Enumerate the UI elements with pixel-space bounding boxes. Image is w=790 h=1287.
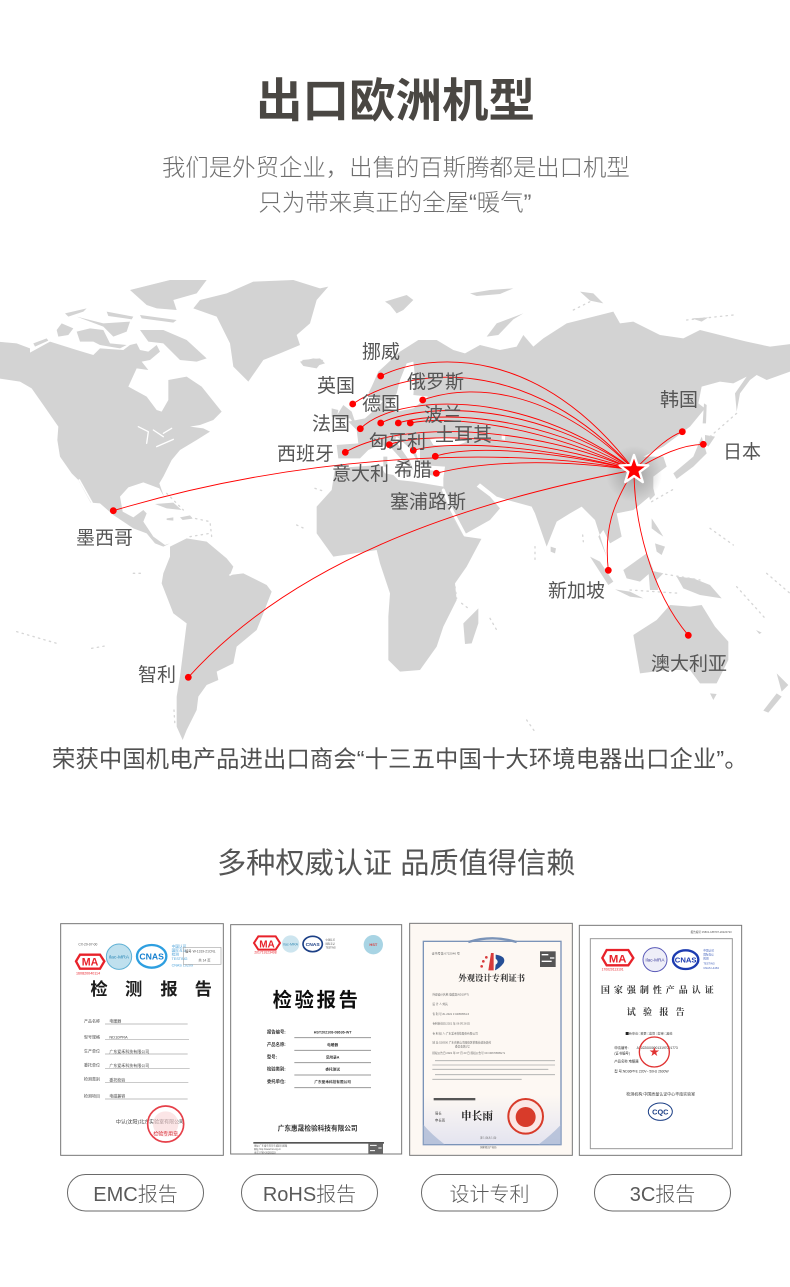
certificate: RoHS report: HST202108-08636-WT: [314, 1030, 352, 1034]
certificate: RoHS report: 国际互认: [326, 942, 336, 946]
certificate: design patent: 申长雨: [435, 1117, 446, 1122]
certificate: RoHS report: 检验类别:: [267, 1066, 286, 1073]
certificate: EMC report: 中国认可: [172, 943, 187, 948]
destination dots: [110, 373, 707, 681]
certificate: design patent: 设 计 人:刘兵: [432, 1002, 448, 1006]
certificate: 3C report: CNAS: [675, 956, 697, 965]
certificate: RoHS report: HST: [369, 942, 378, 947]
certificate: RoHS report: 广东惠晟检验科技有限公司: [278, 1123, 358, 1132]
certificate: EMC report: 电暖器: [109, 1018, 121, 1024]
certificate: RoHS report: 电暖器: [327, 1042, 338, 1047]
country labels: 墨西哥: [76, 528, 133, 549]
certificate: RoHS report: 检验报告: [273, 988, 361, 1011]
pill: RoHS report: RoHS报告: [263, 1183, 356, 1206]
certificate: EMC report: MA: [82, 957, 99, 969]
subtitle: 我们是外贸企业，出售的百斯腾都是出口机型: [162, 154, 630, 180]
certificate: 3C report: CNAS L4463: [703, 966, 719, 970]
section heading: 多种权威认证 品质值得信赖: [217, 847, 575, 880]
country labels: 智利: [138, 664, 176, 686]
certificate: EMC report: ND10PRA: [109, 1035, 128, 1040]
certificate: design patent: 专利申请日:2021 年 06 月 28 日: [432, 1022, 470, 1026]
certificate: design patent: 外观设计名称:电暖器(ND10PT): [432, 992, 469, 996]
certificate: EMC report: 检: [90, 979, 108, 999]
pill: design patent: 设计专利: [450, 1183, 530, 1206]
certificate: 3C report: 检测机构:中国质量认证中心华南实验室: [626, 1091, 695, 1097]
certificate: 3C report: 报告编号:15801-188797-20220723: [690, 930, 732, 934]
certificate: EMC report: 报: [160, 979, 178, 999]
certificate: EMC report: 委托单位: [84, 1062, 100, 1068]
country labels: 意大利: [332, 463, 389, 485]
certificate: RoHS report: CNAS: [306, 942, 320, 948]
certificate: RoHS report: 产品名称:: [267, 1041, 286, 1048]
certificate: EMC report: 共 14 页: [198, 957, 211, 962]
pill: RoHS report: [242, 1174, 378, 1211]
certificate: EMC report: 160820040114: [76, 972, 100, 976]
certificate: 3C report: TESTING: [703, 961, 715, 965]
certificate: EMC report: 检测: [172, 951, 179, 956]
pill: EMC report: EMC报告: [93, 1183, 178, 1206]
certificate: EMC report: 测: [125, 979, 142, 999]
certificate: design patent: 局长: [435, 1111, 442, 1116]
certificate: 3C report: ilac-MRA: [646, 957, 665, 962]
certificate: RoHS report: 报告编号:: [267, 1029, 286, 1036]
country labels: 新加坡: [548, 580, 605, 602]
certificate: 3C report: CQC: [652, 1108, 669, 1117]
country labels: 韩国: [660, 389, 698, 411]
map: Eurasia, Africa and Oceania: [300, 288, 790, 733]
certificate: EMC report: CNAS L0209: [172, 964, 193, 968]
certificate: EMC report: 型号规格: [84, 1033, 100, 1039]
country labels: 西班牙: [277, 443, 334, 465]
pill: 3C report: 3C报告: [630, 1183, 695, 1206]
certificate: design patent: 第 1 页(共 1 页): [480, 1136, 497, 1140]
subtitle: [162, 154, 630, 216]
pill: design patent: [422, 1174, 558, 1211]
certificate: EMC report: [61, 924, 223, 1155]
certificate: EMC report: 电磁兼容: [109, 1093, 125, 1099]
certificate: RoHS report: 型号:: [267, 1053, 278, 1060]
certificate: design patent: 授权公告日:2021 年 07 月 23 日 授权公告号:CN 306705952 S: [432, 1051, 505, 1055]
pill: 3C report: [594, 1174, 730, 1211]
country labels: 波兰: [424, 404, 462, 426]
certificate: EMC report: 委托检验: [109, 1077, 125, 1083]
country labels: 希腊: [394, 459, 432, 481]
route arcs: [113, 362, 703, 677]
certificate: RoHS report: MA: [259, 939, 275, 950]
certificate: 3C report: ★: [649, 1048, 659, 1059]
certificate: EMC report: TESTING: [172, 957, 188, 961]
certificate: EMC report: 产品名称: [84, 1018, 100, 1024]
map: Americas and Greenland: [0, 280, 328, 740]
certificate: 3C report: 试验报告: [627, 1005, 692, 1018]
certificate: 3C report: 国际互认: [703, 952, 714, 956]
country labels: 挪威: [362, 341, 400, 363]
certificate: EMC report: 告: [195, 979, 212, 999]
certificate: 3C report: 170020113191: [602, 968, 624, 972]
certificate: EMC report: CNAS: [139, 952, 164, 962]
country labels: [76, 341, 761, 686]
certificate: 3C report: 型 号:ND36PFE 220V~ 50Hz 2600W: [614, 1068, 669, 1073]
certificate: EMC report: 编号 W-1319-21CNL: [185, 949, 216, 954]
subtitle: 只为带来真正的全屋“暖气”: [258, 190, 531, 216]
certificate: RoHS report: 地址:广东省东莞市东城区科技路: [254, 1144, 288, 1148]
country labels: 日本: [723, 441, 761, 463]
country labels: 澳大利亚: [651, 653, 727, 675]
certificate: 3C report: MA: [609, 953, 626, 965]
certificate: EMC report: 检测类别: [84, 1076, 100, 1082]
certificate: RoHS report: 委托测试: [325, 1067, 340, 1072]
world map: [0, 280, 790, 740]
certificate: RoHS report: [231, 925, 402, 1154]
country labels: 塞浦路斯: [390, 491, 466, 513]
certificate: design patent: [410, 923, 572, 1155]
country labels: 土耳其: [435, 424, 492, 446]
country labels: 匈牙利: [369, 431, 426, 453]
certificate: design patent: 委员会路1号: [455, 1044, 470, 1048]
certificate: RoHS report: 中国认可: [326, 938, 336, 942]
certificate: 3C report: A202200000013197091773: [637, 1046, 678, 1050]
certificate: design patent: 申长雨: [461, 1109, 493, 1124]
title: 出口欧洲机型: [256, 75, 535, 127]
certificate: 3C report: 新申请 □变更 □监督 □复审 □其他: [629, 1031, 672, 1036]
certificate: RoHS report: 广东爱禾科技有限公司: [314, 1079, 351, 1084]
certificate: design patent: 证书号第 6722046 号: [432, 951, 460, 956]
certificate: design patent: 国家知识产权局: [480, 1145, 497, 1149]
certificate: EMC report: 检验专用章: [153, 1130, 178, 1137]
certificate: RoHS report: 见附录A: [326, 1054, 340, 1059]
certificate: 3C report: [579, 925, 742, 1155]
certificate: 3C report: 中国认可: [703, 948, 714, 952]
certificate: RoHS report: 委托单位:: [267, 1078, 286, 1085]
certificate: 3C report: (证书编号): [614, 1050, 630, 1055]
certificate: EMC report: 中认(沈阳)北方实验室有限公司: [116, 1119, 184, 1126]
certificate: RoHS report: 201719123408: [254, 951, 277, 955]
certificate: design patent: 专 利 权 人:广东爱禾科技股份有限公司: [432, 1031, 478, 1035]
certificate: design patent: 专 利 号:ZL 2021 3 04050561.6: [432, 1012, 470, 1016]
certificate: EMC report: 国际互认: [172, 947, 187, 952]
certificate: RoHS report: TESTING: [326, 948, 336, 950]
certificate: EMC report: 广东爱禾科技有限公司: [109, 1062, 149, 1068]
certificate: EMC report: 检测项目: [84, 1092, 100, 1098]
certificate: 3C report: 国家强制性产品认证: [601, 983, 718, 996]
certificate: 3C report: 产品名称:电暖器: [614, 1059, 639, 1064]
certificate: design patent: 外观设计专利证书: [458, 972, 526, 984]
certificate: 3C report: 申请编号:: [614, 1045, 629, 1050]
certificate: RoHS report: ilac-MRA: [283, 942, 299, 946]
certificate: design patent: 地 址:528300 广东省佛山市顺德区伦教街道新塘村: [432, 1041, 492, 1045]
certificate: EMC report: 广东爱禾科技有限公司: [109, 1048, 149, 1054]
country labels: 法国: [312, 413, 350, 435]
pill: EMC report: [68, 1174, 204, 1211]
certificate: 3C report: 检测: [703, 956, 709, 960]
country labels: 德国: [362, 393, 400, 415]
certificate: RoHS report: 网址 http://www.hst.org.cn: [254, 1147, 282, 1151]
certificate: RoHS report: 电话 0769-26283233: [254, 1150, 276, 1154]
certificate: EMC report: 生产单位: [84, 1048, 100, 1054]
country labels: 俄罗斯: [407, 371, 464, 393]
certificate: EMC report: CX-29-07-00: [78, 942, 98, 946]
icon: origin star: [620, 455, 648, 482]
china highlight shadow: [606, 446, 662, 502]
certificate: EMC report: ilac-MRA: [109, 955, 130, 961]
award caption: 荣获中国机电产品进出口商会“十三五中国十大环境电器出口企业”。: [52, 746, 748, 772]
country labels: 英国: [317, 375, 355, 397]
